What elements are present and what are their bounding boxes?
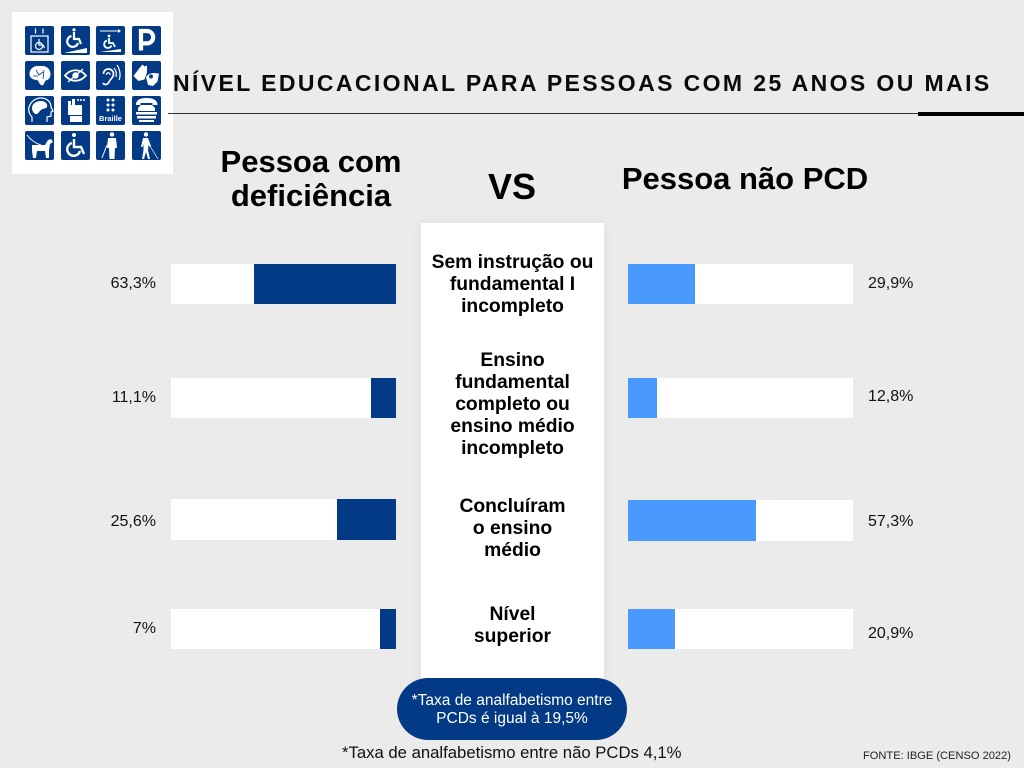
left bar 25,6% [171, 499, 396, 540]
icon: wheelchair ramp with arrow [100, 29, 121, 52]
category: sem instrucao [432, 252, 593, 317]
icon: head with brain [29, 98, 53, 122]
heading: pessoa com deficiencia [221, 144, 401, 213]
left bar 63,3% [171, 264, 396, 304]
heading: pessoa com deficiencia: deficiência [231, 178, 391, 213]
icon: elevator [31, 28, 48, 52]
icon: crossed eye [65, 69, 86, 82]
category: ensino fundamental: fundamental [455, 372, 570, 393]
icon: ear with sound waves [103, 65, 120, 85]
right bar 29,9% [628, 264, 853, 304]
right value 12,8%: 12,8% [868, 388, 913, 405]
right value 29,9%: 29,9% [868, 275, 913, 292]
category: ensino medio: médio [484, 540, 541, 561]
right value 20,9%: 20,9% [868, 625, 913, 642]
icon: guide dog [27, 135, 53, 158]
title: NÍVEL EDUCACIONAL PARA PESSOAS COM 25 ANOS OU MAIS [173, 70, 992, 96]
category: ensino fundamental: completo ou [455, 394, 570, 415]
category: nivel superior [474, 604, 551, 647]
category: ensino medio: o ensino [473, 518, 552, 539]
heading: pessoa nao pcd: Pessoa não PCD [622, 161, 868, 196]
right bar 12,8% [628, 378, 853, 418]
category: ensino medio [459, 496, 566, 561]
category: ensino fundamental: incompleto [461, 438, 564, 459]
icon: hand reading braille [68, 99, 85, 122]
icon: parking [141, 31, 153, 50]
icon: blind person with white cane [141, 132, 158, 159]
category: sem instrucao: incompleto [461, 296, 564, 317]
icon: person with cane [102, 132, 117, 159]
icon: TTY telephone [136, 98, 158, 122]
source: FONTE: IBGE (CENSO 2022) [863, 750, 1011, 762]
left bar 7% [171, 609, 396, 649]
icon: brain [30, 66, 50, 86]
callout: illiteracy PCD [397, 678, 627, 740]
callout: illiteracy PCD: *Taxa de analfabetismo entre [412, 692, 612, 709]
left value 11,1%: 11,1% [112, 389, 156, 406]
category: ensino fundamental: ensino médio [450, 416, 575, 437]
icon: braille: Braille [99, 114, 122, 123]
category: nivel superior: superior [474, 626, 551, 647]
heading: pessoa com deficiencia: Pessoa com [221, 144, 401, 179]
right value 57,3%: 57,3% [868, 513, 913, 530]
left value 7%: 7% [133, 620, 156, 637]
left value 25,6%: 25,6% [111, 513, 156, 530]
panel: categories [421, 223, 604, 688]
category: sem instrucao: Sem instrução ou [432, 252, 593, 273]
icon: braille [99, 98, 122, 123]
category: ensino fundamental: Ensino [480, 350, 545, 371]
icon: wheelchair on ramp [64, 28, 87, 53]
category: nivel superior: Nível [489, 604, 536, 625]
icon: sign language [134, 64, 159, 86]
panel: accessibility icons [12, 12, 173, 174]
right bar 57,3% [628, 500, 853, 541]
heading: vs: VS [488, 166, 536, 207]
left bar 11,1% [171, 378, 396, 418]
category: ensino medio: Concluíram [459, 496, 566, 517]
icon: wheelchair [67, 133, 84, 156]
callout: illiteracy PCD: PCDs é igual à 19,5% [436, 710, 588, 727]
left value 63,3%: 63,3% [111, 275, 156, 292]
category: sem instrucao: fundamental I [450, 274, 575, 295]
note: illiteracy non-PCD: *Taxa de analfabetismo entre não PCDs 4,1% [342, 743, 682, 762]
title rule [168, 112, 1024, 116]
right bar 20,9% [628, 609, 853, 649]
category: ensino fundamental [450, 350, 575, 459]
